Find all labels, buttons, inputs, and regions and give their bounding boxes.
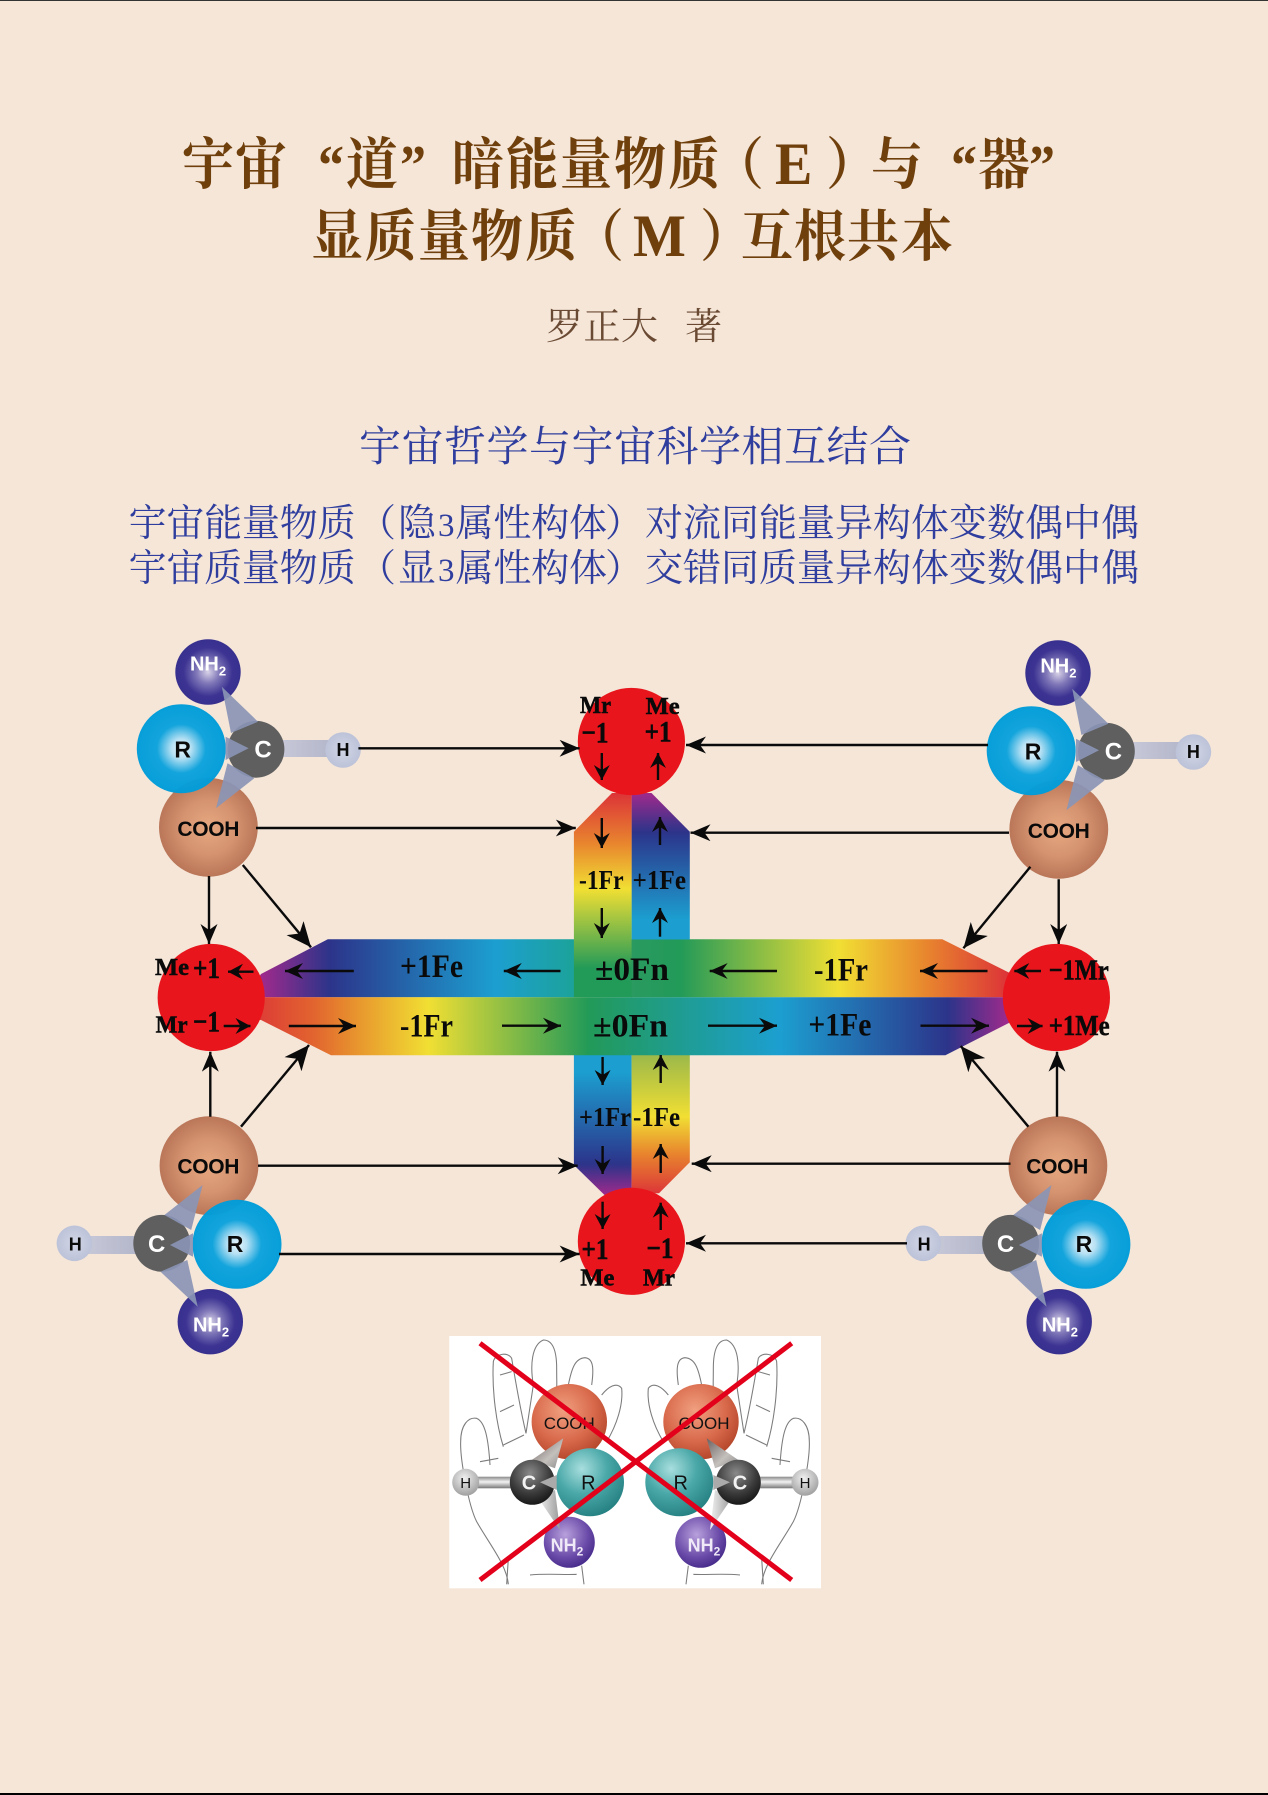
author: 罗正大著: [546, 306, 722, 348]
molecule top left: NH: [190, 654, 219, 676]
labels on horizontal band: -1Fr: [400, 1009, 453, 1045]
labels on horizontal band: +1Fe: [808, 1008, 871, 1044]
labels at red circles: [155, 693, 1110, 1292]
arrows inside the horizontal band: [224, 971, 1043, 1026]
labels at red circles: Me: [155, 955, 189, 981]
molecule bottom left: NH: [193, 1315, 222, 1337]
right molecule: COOH: [678, 1414, 730, 1433]
molecule top left: [137, 639, 361, 877]
right molecule: C: [733, 1472, 747, 1494]
left molecule: COOH: [544, 1414, 595, 1433]
description lines: [129, 503, 1139, 590]
labels at red circles: −1: [193, 1006, 220, 1039]
molecule bottom right: [906, 1116, 1130, 1354]
labels on vertical band: [579, 865, 686, 1132]
labels at red circles: −1: [646, 1232, 674, 1265]
arrows inside the vertical band: [602, 753, 661, 1230]
right molecule: 2: [714, 1545, 721, 1559]
hand outlines: [461, 1340, 809, 1584]
labels on vertical band: -1Fr: [579, 865, 624, 895]
right molecule: NH: [688, 1536, 714, 1556]
right molecule: R: [673, 1472, 688, 1494]
labels on vertical band: +1Fr: [579, 1102, 631, 1132]
molecule bottom left: COOH: [177, 1155, 239, 1178]
molecule bottom right: H: [918, 1234, 931, 1254]
molecule top left: 2: [219, 664, 226, 678]
left molecule: H: [460, 1475, 471, 1492]
molecule top right: NH: [1040, 656, 1069, 678]
left molecule: R: [581, 1472, 596, 1494]
panel: crossed out mirrored molecules on hands: [449, 1336, 821, 1588]
labels at red circles: −1Mr: [1049, 954, 1109, 986]
left molecule: NH: [551, 1536, 577, 1556]
title: 显质量物质（M ）互根共本: [311, 202, 953, 269]
subtitle: 宇宙哲学与宇宙科学相互结合: [359, 425, 911, 471]
right molecule: H: [800, 1475, 810, 1492]
molecule top right: R: [1025, 738, 1042, 764]
molecule bottom left: H: [69, 1234, 82, 1254]
molecule bottom left: [57, 1116, 281, 1354]
molecule top right: C: [1105, 738, 1122, 766]
description lines: 宇宙质量物质（显3属性构体）交错同质量异构体变数偶中偶: [129, 548, 1139, 590]
labels at red circles: Mr: [643, 1266, 675, 1292]
labels on horizontal band: -1Fr: [814, 953, 868, 989]
molecule top left: R: [174, 736, 191, 762]
red cross: [480, 1343, 792, 1580]
labels at red circles: Mr: [156, 1013, 188, 1039]
left molecule: 2: [577, 1545, 584, 1559]
arrows: molecules to centre: [209, 745, 1059, 1254]
molecule top left: COOH: [177, 818, 239, 841]
molecule top right: H: [1187, 742, 1200, 762]
molecule bottom left: C: [148, 1231, 165, 1258]
labels at red circles: −1: [582, 717, 608, 750]
labels at red circles: +1: [582, 1233, 608, 1266]
molecule top right: 2: [1069, 666, 1076, 680]
labels at red circles: Me: [646, 694, 680, 720]
molecule top left: C: [254, 736, 272, 764]
molecule top left: H: [336, 740, 350, 760]
molecule bottom right: COOH: [1026, 1155, 1088, 1178]
labels at red circles: Me: [580, 1266, 615, 1292]
molecule bottom right: R: [1076, 1231, 1093, 1257]
molecule bottom left: R: [227, 1231, 244, 1257]
title: 宇宙“道”暗能量物质（E ）与“器”: [182, 130, 1055, 197]
labels on horizontal band: ±0Fn: [595, 952, 669, 988]
labels on horizontal band: +1Fe: [400, 949, 463, 985]
labels at red circles: Mr: [580, 693, 611, 719]
title: [182, 130, 1055, 269]
labels at red circles: +1Me: [1049, 1010, 1110, 1042]
central rainbow cross: [245, 793, 1009, 1195]
red circles: [158, 688, 1110, 1295]
labels at red circles: +1: [645, 716, 672, 749]
description lines: 宇宙能量物质（隐3属性构体）对流同能量异构体变数偶中偶: [129, 503, 1139, 545]
molecule bottom left: 2: [222, 1325, 229, 1340]
labels on vertical band: +1Fe: [632, 865, 686, 895]
labels at red circles: +1: [193, 952, 220, 985]
molecule top right: COOH: [1028, 820, 1090, 843]
labels on vertical band: -1Fe: [633, 1102, 680, 1132]
molecule bottom right: 2: [1071, 1325, 1078, 1340]
right molecule: [645, 1384, 818, 1568]
molecule bottom right: C: [997, 1231, 1014, 1258]
left molecule: [452, 1384, 624, 1568]
labels on horizontal band: ±0Fn: [593, 1009, 668, 1045]
left molecule: C: [522, 1472, 536, 1494]
labels on horizontal band: [400, 949, 871, 1045]
molecule bottom right: NH: [1042, 1315, 1071, 1337]
molecule top right: [987, 640, 1211, 879]
